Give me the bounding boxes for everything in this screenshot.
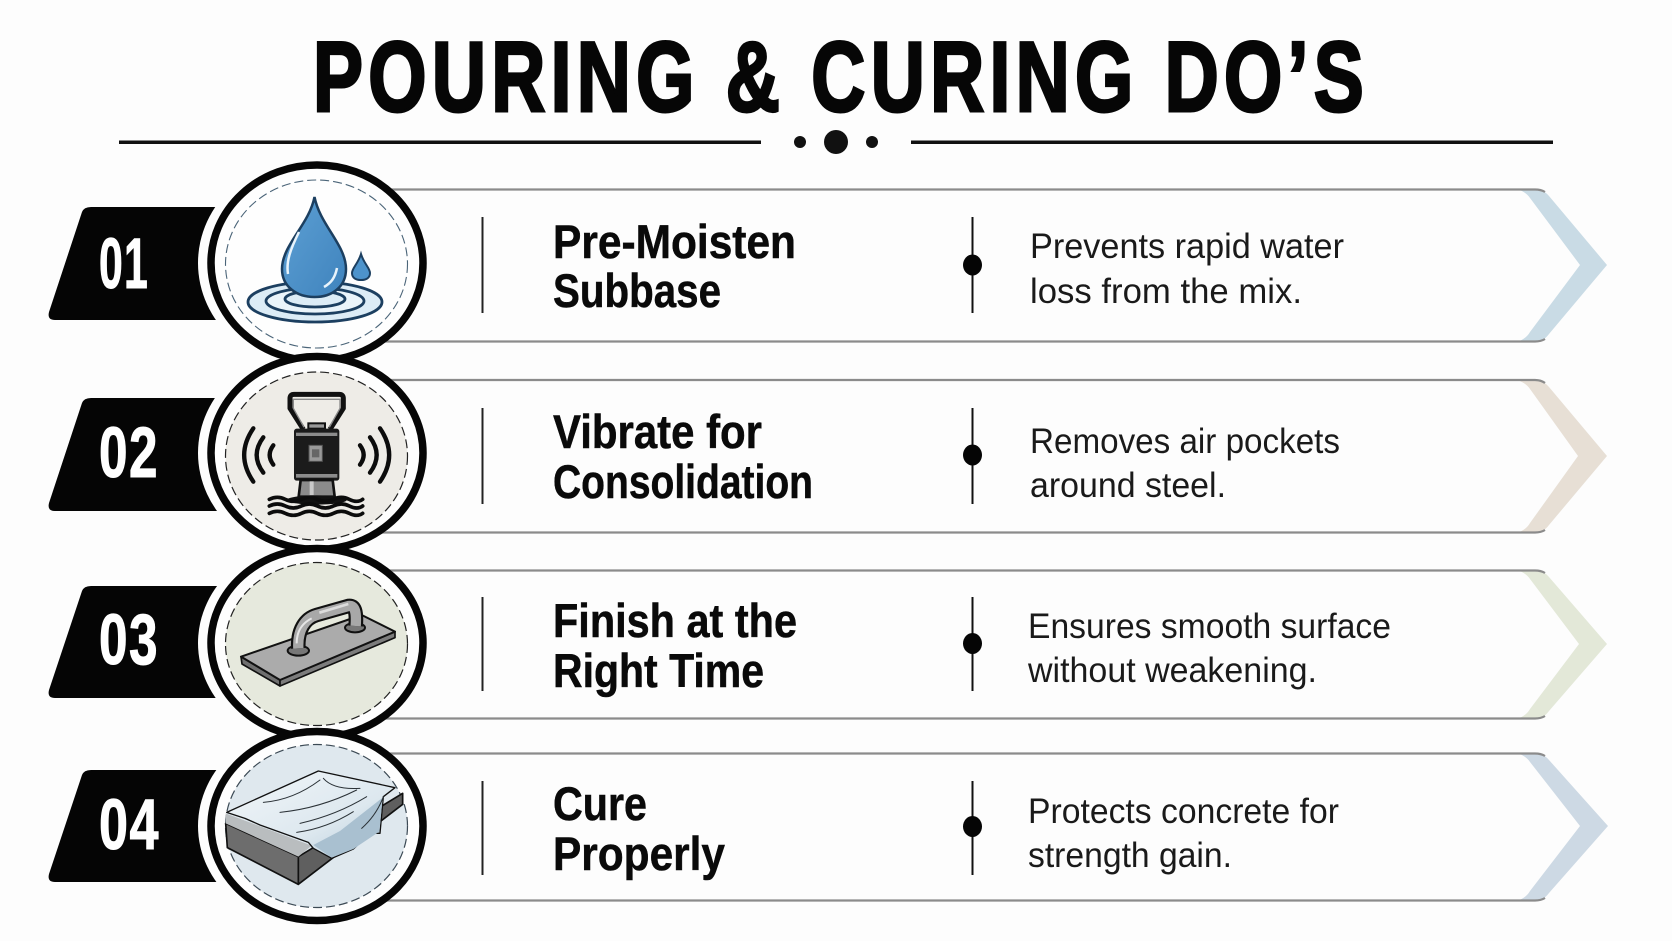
number tag 03 <box>49 586 225 698</box>
divider 1 <box>482 217 484 313</box>
divider 1 <box>482 781 484 875</box>
panel: row 4 bar <box>380 753 1608 901</box>
icon: trowel badge <box>211 548 423 738</box>
heading: Pre-Moisten <box>553 215 796 268</box>
divider with dot <box>963 408 982 504</box>
description: Removes air pockets <box>1030 422 1340 461</box>
number tag 04: 04 <box>99 786 160 865</box>
panel: row 3 bar <box>380 570 1607 719</box>
number tag 01: 01 <box>99 225 149 304</box>
description: loss from the mix. <box>1030 272 1302 311</box>
title: POURING & CURING DO’S <box>313 21 1369 132</box>
heading <box>553 594 797 697</box>
description: Prevents rapid water <box>1030 227 1344 266</box>
heading: Properly <box>553 827 725 880</box>
description <box>1030 422 1340 505</box>
number tag 04 <box>49 770 225 882</box>
number tag 03: 03 <box>99 601 159 680</box>
divider with dot <box>963 217 982 313</box>
heading <box>553 777 725 880</box>
number tag 01 <box>49 207 225 320</box>
icon: covered slab badge <box>211 732 423 920</box>
panel: row 1 bar <box>380 189 1607 342</box>
heading: Consolidation <box>553 455 813 508</box>
panel: row 2 bar <box>380 380 1607 533</box>
heading <box>553 405 813 508</box>
heading: Finish at the <box>553 594 797 647</box>
heading: Right Time <box>553 644 764 697</box>
description: without weakening. <box>1027 651 1317 690</box>
title divider <box>119 130 1553 154</box>
number tag 02: 02 <box>99 414 159 493</box>
icon: concrete vibrator badge <box>211 356 423 550</box>
heading: Vibrate for <box>553 405 762 458</box>
icon: water drop badge <box>211 165 423 361</box>
description: strength gain. <box>1028 836 1232 875</box>
divider with dot <box>963 781 982 875</box>
divider 1 <box>482 597 484 691</box>
description: Ensures smooth surface <box>1028 607 1391 646</box>
description <box>1027 607 1391 690</box>
heading: Cure <box>553 777 647 830</box>
description: Protects concrete for <box>1028 792 1339 831</box>
divider 1 <box>482 408 484 504</box>
heading <box>553 215 796 317</box>
description <box>1030 227 1344 311</box>
number tag 02 <box>49 398 225 511</box>
divider with dot <box>963 597 982 691</box>
description <box>1028 792 1339 875</box>
heading: Subbase <box>553 264 721 317</box>
description: around steel. <box>1030 466 1226 505</box>
